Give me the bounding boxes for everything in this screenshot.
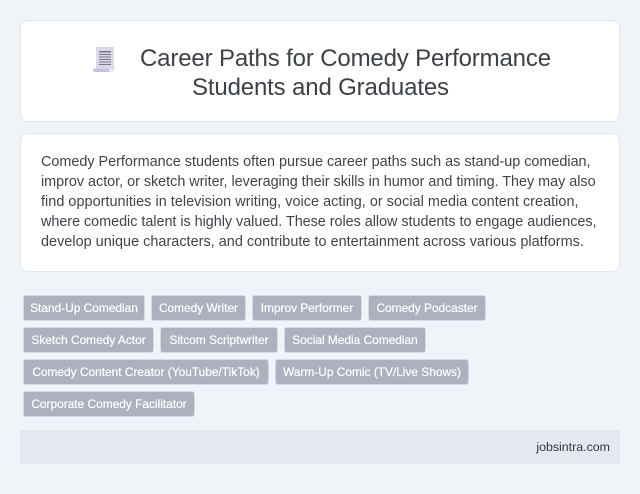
description text: develop unique characters, and contribute to entertainment across various platforms. bbox=[41, 234, 584, 250]
panel: header card bbox=[20, 20, 620, 122]
tag: Corporate Comedy Facilitator: Corporate Comedy Facilitator bbox=[31, 397, 187, 411]
heading line 2: Students and Graduates bbox=[192, 74, 449, 101]
footer text: jobsintra.com bbox=[536, 440, 610, 454]
heading: Career Paths for Comedy Performance bbox=[140, 45, 551, 72]
tag: Stand-Up Comedian: Stand-Up Comedian bbox=[30, 301, 138, 315]
panel: description card bbox=[20, 133, 620, 272]
tag: Social Media Comedian bbox=[284, 327, 426, 353]
tag: Corporate Comedy Facilitator bbox=[23, 391, 195, 417]
tag: Sitcom Scriptwriter: Sitcom Scriptwriter bbox=[169, 333, 269, 347]
description text: improv actor, or sketch writer, leveraging their skills in humor and timing. They may also bbox=[41, 174, 596, 190]
tag: Improv Performer: Improv Performer bbox=[261, 301, 353, 315]
tag: Warm-Up Comic bbox=[275, 359, 469, 385]
description text: where comedic talent is highly valued. These roles allow students to engage audiences, bbox=[41, 214, 597, 230]
tag: Stand-Up Comedian bbox=[23, 295, 145, 321]
tag: Social Media Comedian: Social Media Comedian bbox=[292, 333, 418, 347]
tag: Warm-Up Comic: Warm-Up Comic (TV/Live Shows) bbox=[283, 365, 461, 379]
description text bbox=[41, 154, 597, 250]
tag: Improv Performer bbox=[252, 295, 362, 321]
tag: Comedy Writer: Comedy Writer bbox=[159, 301, 238, 315]
icon: paper scroll bbox=[93, 47, 114, 72]
tag: Comedy Podcaster: Comedy Podcaster bbox=[376, 301, 478, 315]
tag: Comedy Podcaster bbox=[368, 295, 486, 321]
tag: Comedy Content Creator bbox=[23, 359, 269, 385]
description text: find opportunities in television writing, voice acting, or social media content creation, bbox=[41, 194, 579, 210]
tag: Comedy Content Creator: Comedy Content Creator (YouTube/TikTok) bbox=[32, 365, 260, 379]
description text: Comedy Performance students often pursue career paths such as stand-up comedian, bbox=[41, 154, 591, 170]
tag: Sitcom Scriptwriter bbox=[160, 327, 278, 353]
footer bar bbox=[20, 430, 620, 464]
tag: Sketch Comedy Actor: Sketch Comedy Actor bbox=[31, 333, 146, 347]
tag: Comedy Writer bbox=[151, 295, 246, 321]
tag: Sketch Comedy Actor bbox=[23, 327, 154, 353]
